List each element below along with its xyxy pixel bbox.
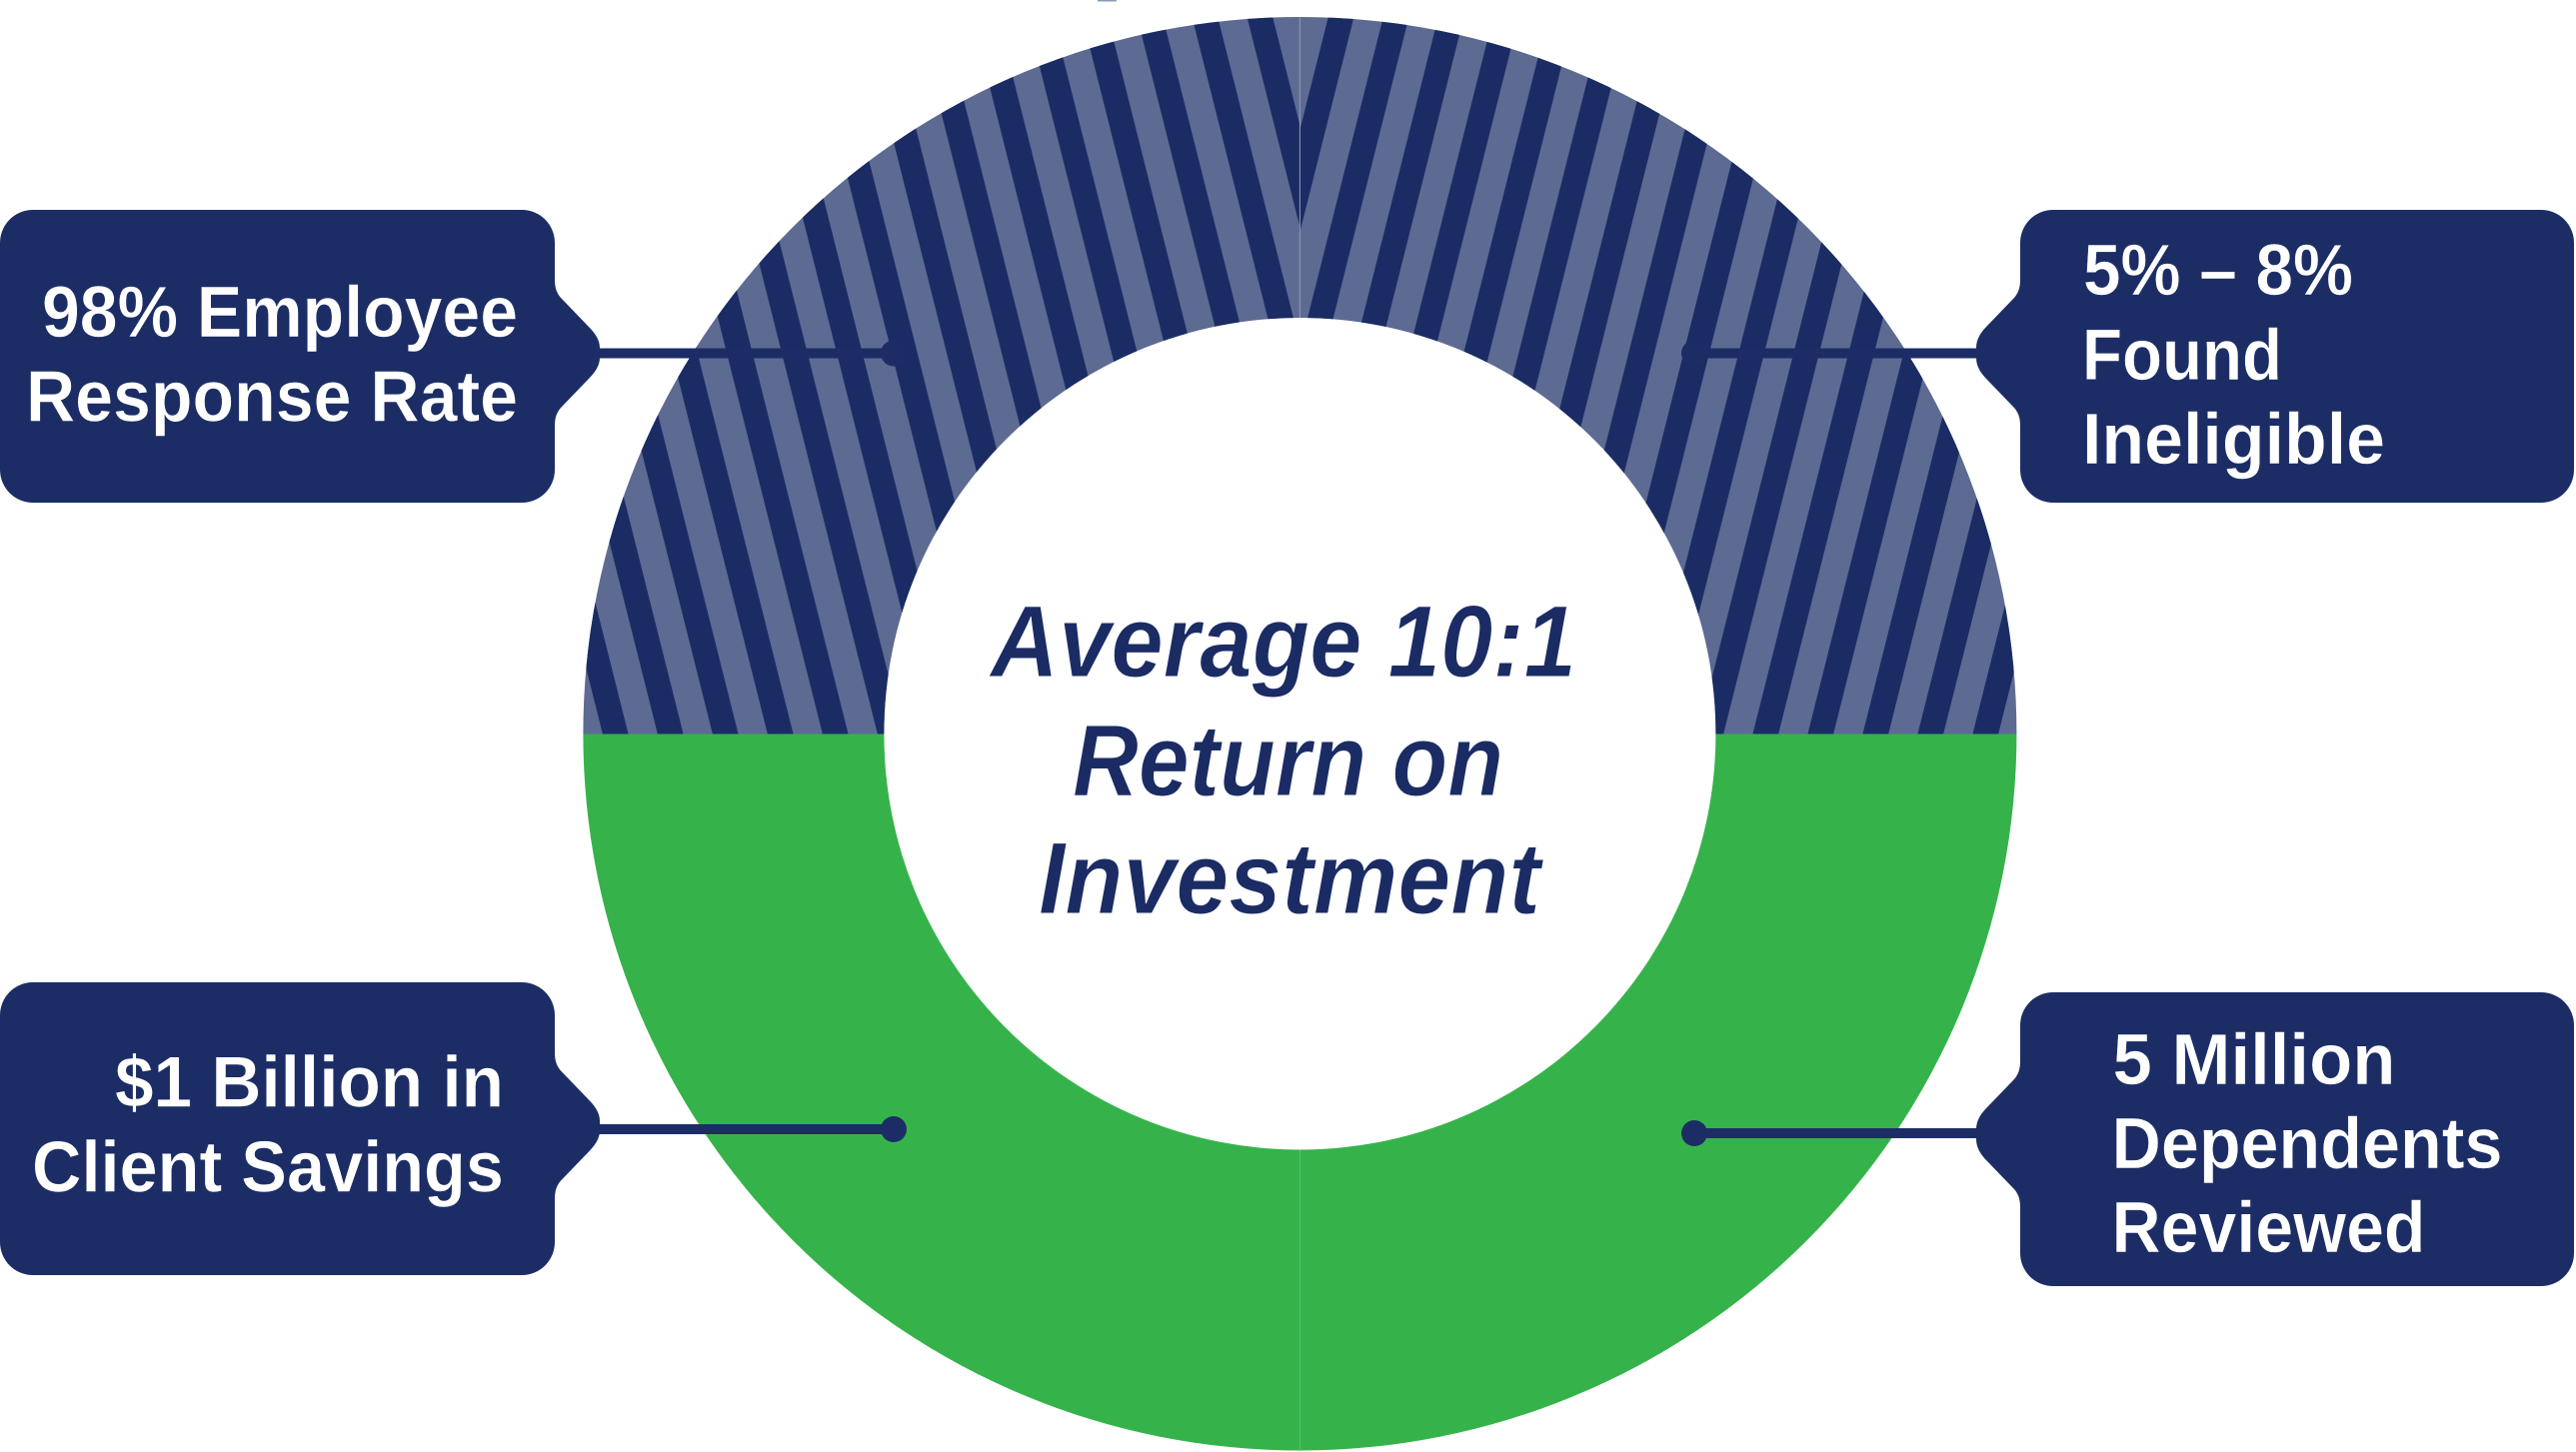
- callout: 98% employee response rate: 98% Employee: [42, 273, 518, 353]
- callout: 98% employee response rate: [0, 210, 907, 503]
- center text: average return on investment: Investment: [1039, 821, 1544, 935]
- callout: $1 billion in client savings: Client Savings: [32, 1128, 504, 1208]
- callout: 5 million dependents reviewed: [1681, 992, 2574, 1286]
- callout: 5% to 8% found ineligible: [1681, 210, 2574, 503]
- callout: 5 million dependents reviewed: Dependents: [2111, 1104, 2503, 1184]
- callout: 5 million dependents reviewed: 5 Million: [2113, 1020, 2395, 1100]
- callout: 5% to 8% found ineligible: Found: [2082, 316, 2282, 396]
- center text: average return on investment: [988, 585, 1576, 935]
- callout: 5 million dependents reviewed: Reviewed: [2111, 1188, 2425, 1268]
- donut chart: [583, 17, 2017, 1451]
- callout: $1 billion in client savings: [0, 982, 907, 1275]
- callout: 5% to 8% found ineligible: 5% – 8%: [2083, 231, 2353, 311]
- center text: average return on investment: Average 10:1: [988, 585, 1576, 699]
- callout: $1 billion in client savings: $1 Billion in: [115, 1043, 504, 1123]
- segment: lower green half: [583, 733, 2016, 1451]
- center text: average return on investment: Return on: [1073, 704, 1503, 817]
- segment: upper right striped: [1299, 17, 2017, 733]
- callout: 5% to 8% found ineligible: Ineligible: [2082, 400, 2385, 480]
- segment: upper left striped: [583, 17, 1299, 733]
- callout: 98% employee response rate: Response Rate: [26, 358, 518, 438]
